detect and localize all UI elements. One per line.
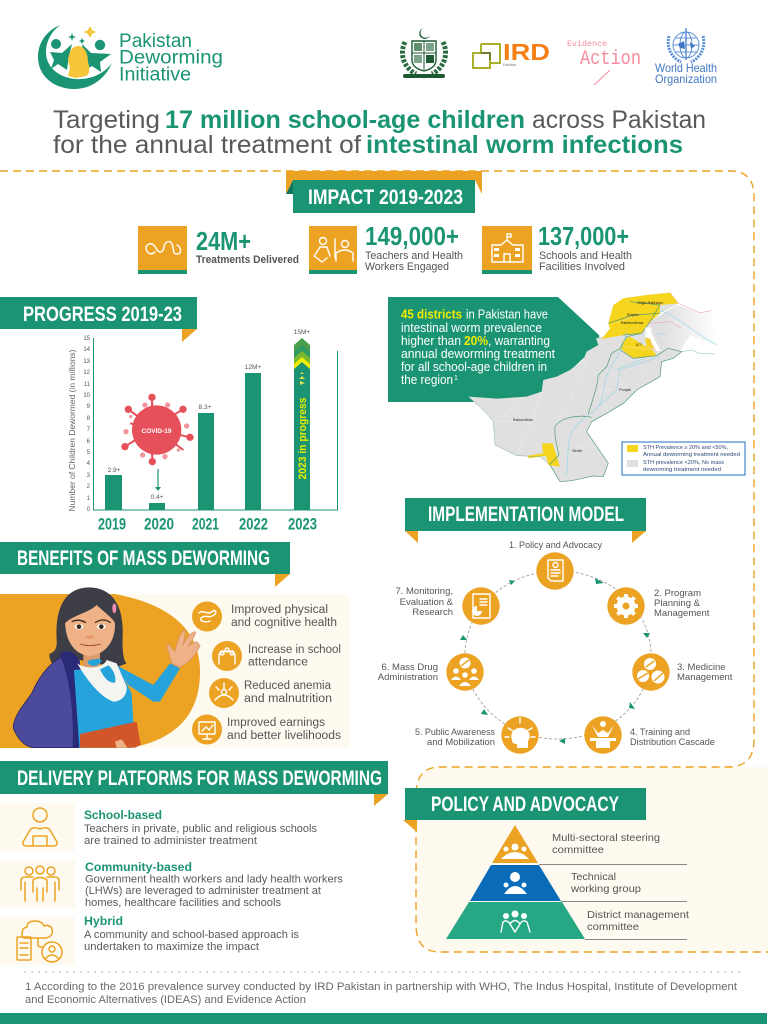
logo: IRD: Pakistan	[503, 63, 516, 67]
step 6: Administration	[378, 672, 438, 683]
step 2: Planning &	[654, 598, 701, 609]
benefit: improved physical and cognitive health	[192, 602, 337, 632]
tier: technical working group: working group	[570, 883, 641, 895]
benefit: reduced anemia and malnutrition	[209, 678, 332, 708]
callout: 45 districts: intestinal worm prevalence	[401, 321, 542, 335]
callout: 45 districts: the region	[401, 373, 453, 387]
year labels	[98, 514, 317, 534]
heading: Policy and advocacy	[403, 788, 646, 832]
icon: COVID-19 virus with drop arrow	[121, 394, 194, 491]
benefit: improved physical and cognitive health: Improved physical	[231, 604, 328, 616]
callout: 45 districts: 20%	[464, 334, 488, 348]
benefit: reduced anemia and malnutrition: Reduced anemia	[244, 680, 332, 692]
stat: treatments delivered	[138, 226, 299, 274]
bar value labels: 0.4+	[151, 494, 164, 501]
benefit: improved physical and cognitive health: and cognitive health	[231, 617, 337, 629]
step 4: Distribution Cascade	[630, 737, 715, 748]
footnote: and Economic Alternatives (IDEAS) and Evidence Action	[25, 994, 306, 1006]
icon: COVID-19 virus with drop arrow: COVID-19	[142, 428, 172, 435]
2023 in-progress bar	[294, 338, 310, 510]
stat: teachers and health workers: Teachers and Health	[365, 250, 463, 262]
icon: school	[482, 226, 532, 274]
pyramid: governance structure	[446, 825, 689, 940]
y axis ticks: 14	[83, 347, 91, 353]
y axis ticks: 7	[87, 427, 91, 433]
bar value labels: 12M+	[245, 364, 261, 371]
y axis ticks: 3	[87, 473, 91, 479]
icon: teachers and health workers	[309, 226, 357, 274]
main title: for the annual treatment of	[53, 131, 361, 159]
year labels: 2020	[144, 514, 174, 534]
benefit: improved earnings and better livelihoods: Improved earnings	[227, 717, 325, 729]
platform: hybrid	[0, 916, 299, 965]
platform: school-based: Teachers in private, public and religious schools	[84, 823, 317, 835]
callout: 45 districts: annual deworming treatment	[401, 347, 555, 361]
y axis ticks: 5	[87, 450, 91, 456]
bar chart: children dewormed by year	[67, 329, 338, 534]
tier: multi-sectoral steering committee	[492, 825, 660, 863]
logo: World Health Organization: Organization	[655, 72, 717, 86]
footer band	[0, 1013, 767, 1024]
heading: Impact 2019-2023	[286, 171, 482, 213]
y axis ticks: 1	[87, 496, 91, 502]
map region labels: ICT	[636, 343, 643, 347]
heading: Progress 2019-23	[0, 297, 197, 342]
logo: Evidence Action: Evidence	[567, 40, 607, 49]
main title: across Pakistan	[532, 106, 706, 134]
benefit: increase in school attendance	[212, 641, 341, 671]
logo: IRD: IRD	[503, 39, 550, 65]
tier: multi-sectoral steering committee: Multi-sectoral steering	[552, 832, 660, 844]
y axis ticks: 10	[83, 393, 91, 399]
step 4	[584, 716, 715, 754]
step 7: 7. Monitoring,	[395, 586, 453, 597]
logo: World Health Organization: World Health	[655, 61, 717, 75]
icon: worm	[138, 226, 187, 274]
benefit: increase in school attendance: attendance	[248, 656, 308, 668]
stat: schools and health facilities	[482, 221, 632, 274]
heading: Impact 2019-2023: IMPACT 2019-2023	[308, 186, 463, 209]
step 3: 3. Medicine	[677, 662, 726, 673]
main title: 17 million school-age children	[165, 106, 525, 134]
step 6	[378, 653, 484, 691]
main title: Targeting	[53, 106, 160, 134]
stat: schools and health facilities: Schools and Health	[539, 250, 632, 262]
y axis ticks: 2	[87, 484, 91, 490]
cycle diagram: implementation model	[378, 540, 733, 754]
year labels: 2021	[192, 514, 219, 534]
panel: benefits	[0, 587, 350, 748]
bar value labels	[108, 329, 310, 501]
step 1	[509, 540, 602, 590]
platform: community-based: homes, healthcare facilities and schools	[85, 897, 281, 909]
step 2: 2. Program	[654, 588, 701, 599]
platform: community-based: Government health workers and lady health workers	[85, 874, 343, 886]
platform: community-based: (LHWs) are leveraged to administer treatment at	[85, 885, 321, 897]
logo: Evidence Action: Action	[580, 48, 641, 71]
platform: hybrid: undertaken to maximize the impact	[84, 941, 259, 953]
benefit: increase in school attendance: Increase in school	[248, 644, 341, 656]
y axis ticks: 11	[84, 382, 91, 388]
illustration: schoolgirl with backpack	[13, 587, 200, 748]
year labels: 2022	[239, 514, 268, 534]
platform: hybrid: A community and school-based approach is	[84, 929, 299, 941]
footnote	[25, 981, 737, 1006]
heading: Policy and advocacy: POLICY AND ADVOCACY	[431, 793, 619, 816]
dashed content border	[0, 171, 768, 952]
y axis ticks: 0	[87, 507, 91, 513]
map region labels: Punjab	[619, 388, 631, 392]
y axis ticks: 4	[87, 461, 91, 467]
y axis ticks: 15	[83, 336, 91, 342]
platform: community-based	[0, 860, 343, 909]
stat: teachers and health workers: Workers Engaged	[365, 261, 449, 273]
callout: 45 districts: in Pakistan have	[466, 308, 548, 322]
icon: teacher at desk	[0, 803, 75, 851]
y axis ticks: 12	[83, 370, 91, 376]
stat: teachers and health workers	[309, 221, 463, 274]
heading: Progress 2019-23: PROGRESS 2019-23	[23, 303, 182, 326]
stat: teachers and health workers: 149,000+	[365, 221, 459, 251]
callout: 45 districts: 45 districts	[401, 308, 462, 322]
tier: technical working group: Technical	[571, 871, 616, 883]
benefit: reduced anemia and malnutrition: and malnutrition	[244, 693, 332, 705]
map of Pakistan with STH prevalence	[468, 293, 718, 482]
callout: 45 districts: 1	[454, 375, 458, 382]
logo: Evidence Action	[567, 40, 641, 85]
logo: World Health Organization	[655, 28, 717, 86]
heading: Delivery platforms for mass deworming: DELIVERY PLATFORMS FOR MASS DEWORMING	[17, 767, 382, 790]
step 7	[395, 586, 500, 625]
logo: state emblem of Pakistan	[402, 28, 446, 78]
heading: Implementation model: IMPLEMENTATION MODEL	[428, 503, 624, 526]
tier: district management committee: committee	[587, 921, 639, 933]
footnote divider	[25, 971, 742, 973]
2023 in-progress bar: 2023 in progress	[297, 398, 309, 480]
platform: school-based: School-based	[84, 810, 162, 822]
map region labels	[513, 300, 663, 453]
y axis ticks	[83, 336, 91, 513]
step 7: Evaluation &	[400, 597, 454, 608]
callout: 45 districts: higher than	[401, 334, 461, 348]
stat: treatments delivered: Treatments Delivered	[196, 254, 299, 266]
icon: group of three people	[0, 860, 75, 908]
bar value labels: 15M+	[294, 329, 310, 336]
logo: IRD	[473, 39, 550, 68]
bars	[105, 373, 261, 510]
map region labels: Balochistan	[513, 418, 533, 422]
step 4: 4. Training and	[630, 727, 690, 738]
platform: community-based: Community-based	[85, 862, 192, 874]
stat: schools and health facilities: 137,000+	[538, 221, 629, 251]
bar value labels: 8.3+	[199, 404, 212, 411]
callout: 45 districts: , warranting	[488, 334, 550, 348]
logo wordmark: Deworming	[119, 48, 223, 68]
stat: schools and health facilities: Facilities Involved	[539, 261, 625, 273]
axes	[94, 338, 338, 510]
heading: Benefits of mass deworming: BENEFITS OF MASS DEWORMING	[17, 547, 270, 570]
platform: school-based	[0, 803, 317, 851]
icon: cloud, device and person	[0, 917, 75, 965]
y axis ticks: 6	[87, 439, 91, 445]
policy cream background	[416, 767, 768, 952]
callout: 45 districts	[388, 297, 601, 402]
leader lines	[539, 864, 687, 940]
y axis ticks: 13	[83, 359, 91, 365]
platform: hybrid: Hybrid	[84, 916, 123, 928]
logo wordmark: Pakistan	[119, 31, 192, 52]
cycle arrows	[460, 578, 650, 744]
heading: Benefits of mass deworming	[0, 542, 290, 587]
step 5	[415, 716, 539, 754]
bar value labels: 2.9+	[108, 467, 121, 474]
heading: Implementation model	[405, 498, 646, 543]
year labels: 2019	[98, 514, 126, 534]
step 2: Management	[654, 608, 710, 619]
logo wordmark	[119, 31, 223, 86]
y axis ticks: 9	[87, 404, 91, 410]
logo mark	[38, 25, 112, 89]
map region labels: Pakhtunkhwa	[621, 321, 644, 325]
map region labels: Sindh	[572, 449, 582, 453]
logo wordmark: Initiative	[119, 64, 191, 86]
step 3: Management	[677, 672, 733, 683]
step 6: 6. Mass Drug	[382, 662, 438, 673]
year labels: 2023	[288, 514, 317, 534]
y axis label: Number of Children Dewormed (in millions)	[67, 349, 77, 512]
map legend: STH prevalence <20%, No mass	[643, 460, 725, 466]
callout: 45 districts: for all school-age children in	[401, 360, 547, 374]
tier: technical working group	[470, 865, 641, 901]
benefit: improved earnings and better livelihoods: and better livelihoods	[227, 730, 341, 742]
step 5: 5. Public Awareness	[415, 727, 495, 738]
step 2	[607, 587, 710, 625]
benefit: improved earnings and better livelihoods	[192, 714, 341, 744]
footnote: 1 According to the 2016 prevalence survey conducted by IRD Pakistan in partnership with WHO, The Indus Hospital, Institute of Development	[25, 981, 737, 993]
map region labels: Khyber	[627, 313, 640, 317]
step 7: Research	[412, 607, 453, 618]
platform: school-based: are trained to administer treatment	[84, 835, 257, 847]
stat: treatments delivered: 24M+	[196, 226, 251, 256]
dashed cycle ring	[465, 571, 651, 739]
map region labels: Gilgit-Baltistan	[637, 300, 663, 305]
tier: district management committee: District management	[587, 909, 689, 921]
map legend: deworming treatment needed	[643, 467, 721, 473]
tier: multi-sectoral steering committee: committee	[552, 844, 604, 856]
y axis ticks: 8	[87, 416, 91, 422]
main title	[53, 106, 706, 159]
logo: Pakistan Deworming Initiative	[38, 25, 223, 89]
map legend: STH Prevalence ≥ 20% and <50%,	[643, 445, 728, 451]
step 3	[632, 653, 733, 691]
step 1: 1. Policy and Advocacy	[509, 540, 602, 551]
map legend	[622, 442, 745, 475]
map legend: Annual deworming treatment needed	[643, 452, 740, 458]
heading: Delivery platforms for mass deworming	[0, 761, 388, 806]
tier: district management committee	[446, 902, 689, 939]
main title: intestinal worm infections	[366, 131, 683, 159]
step 5: and Mobilization	[427, 737, 495, 748]
